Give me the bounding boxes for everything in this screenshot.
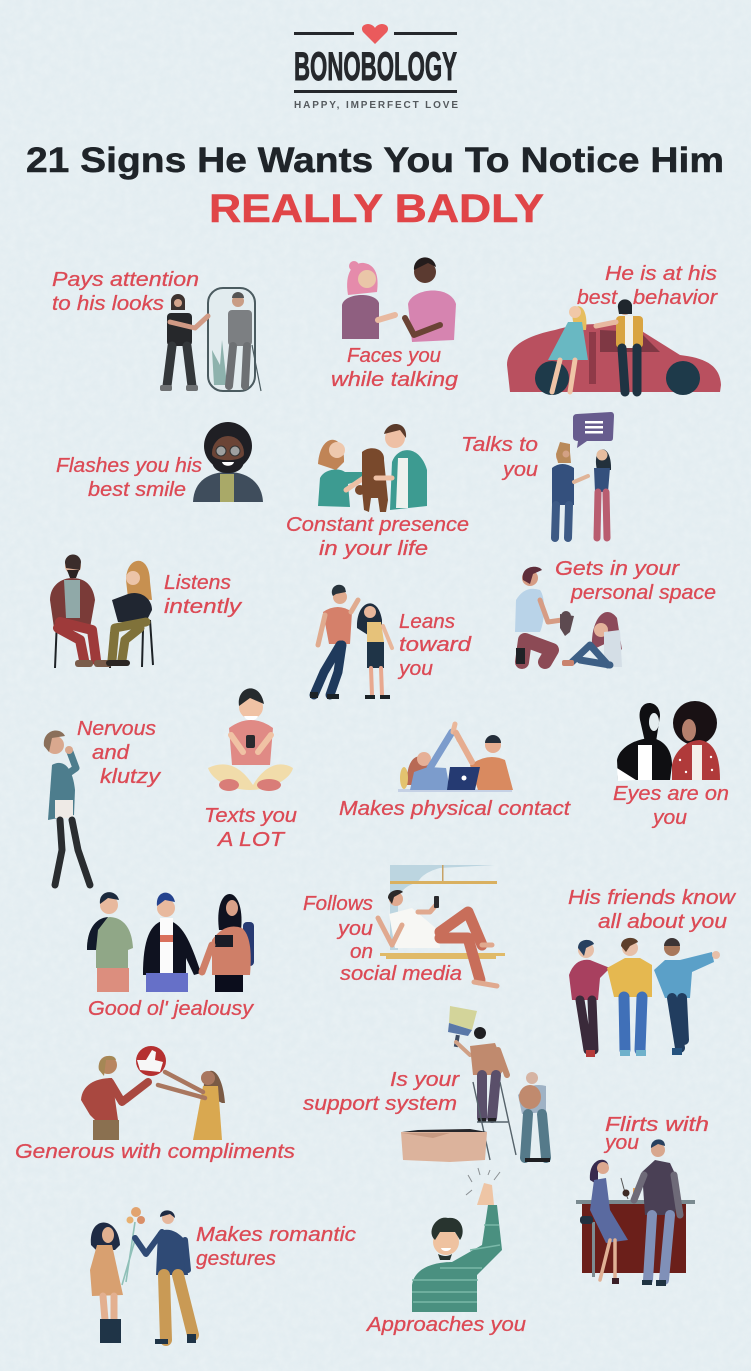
panel: faces you while talking	[331, 257, 459, 391]
panel: makes romantic gestures	[90, 1207, 357, 1344]
panel: his friends know all about you	[568, 886, 736, 1057]
label: Makes romantic	[196, 1223, 357, 1246]
illustration: two people talking	[342, 257, 456, 342]
label: A LOT	[216, 828, 286, 851]
title: 21 Signs He Wants You To Notice Him	[26, 141, 724, 180]
subtitle: REALLY BADLY	[209, 187, 544, 231]
label	[577, 262, 718, 309]
illustration: two people seated	[50, 554, 153, 668]
illustration: smiling man with afro	[193, 422, 263, 502]
label: you	[651, 806, 687, 829]
label: He is at his	[605, 262, 717, 285]
label: all about you	[598, 910, 727, 933]
illustration: man texting, sitting cross-legged	[208, 688, 293, 791]
label	[196, 1223, 357, 1270]
panel: constant presence in your life	[286, 424, 469, 560]
label	[77, 717, 162, 788]
panel: texts you a lot	[204, 688, 297, 851]
label: Flirts with	[605, 1113, 709, 1136]
label: Gets in your	[555, 557, 680, 580]
label	[461, 433, 538, 481]
label	[204, 804, 297, 851]
illustration: couple by red car	[507, 299, 721, 395]
illustration: leaning couple	[310, 585, 392, 699]
label: Constant presence	[286, 513, 469, 536]
panel: pays attention to his looks	[52, 268, 261, 391]
label: support system	[303, 1092, 457, 1115]
illustration: man at mirror	[160, 288, 261, 391]
label	[164, 571, 243, 618]
label: best smile	[88, 478, 186, 501]
label: gestures	[196, 1247, 276, 1270]
label	[303, 1068, 460, 1115]
panel: eyes are on you	[613, 701, 729, 829]
label: Is your	[390, 1068, 460, 1091]
label: personal space	[570, 581, 716, 604]
label: Talks to	[461, 433, 538, 456]
label: klutzy	[100, 765, 162, 788]
label: you	[501, 458, 538, 481]
label: Pays attention	[52, 268, 199, 291]
panel: listens intently	[50, 554, 243, 668]
panel: leans toward you	[310, 585, 472, 699]
illustration: couple looking at each other	[617, 701, 720, 781]
label: Listens	[164, 571, 231, 594]
label: you	[336, 917, 373, 940]
label: you	[397, 657, 433, 680]
label: Approaches you	[365, 1313, 526, 1336]
label: social media	[340, 962, 462, 985]
label: behavior	[633, 286, 718, 309]
label: to his looks	[52, 292, 164, 315]
panel: generous with compliments	[15, 1046, 295, 1163]
label	[613, 782, 729, 829]
label: Faces you	[347, 344, 441, 367]
label: Flashes you his	[56, 454, 202, 477]
panel: follows you on social media	[303, 865, 505, 986]
icon: speech bubble	[573, 412, 614, 448]
panel: is your support system	[303, 1006, 550, 1162]
label: Makes physical contact	[339, 797, 571, 820]
illustration: three people, holding hands	[87, 892, 254, 992]
panel: gets in your personal space	[515, 557, 716, 667]
panel: nervous and klutzy	[44, 717, 162, 885]
logo tagline: HAPPY, IMPERFECT LOVE	[294, 100, 458, 111]
illustration: man waving	[412, 1168, 502, 1312]
panel: good ol' jealousy	[87, 892, 255, 1020]
label: intently	[164, 595, 243, 618]
panel: approaches you	[365, 1168, 526, 1336]
illustration: man and woman talking	[552, 442, 611, 538]
label	[397, 610, 472, 680]
label: Follows	[303, 892, 373, 915]
label	[286, 513, 469, 560]
label: Leans	[399, 610, 455, 633]
label: and	[92, 741, 130, 764]
label: in your life	[319, 537, 428, 560]
panel: talks to you	[461, 412, 614, 538]
label: while talking	[331, 368, 459, 391]
label	[331, 344, 459, 391]
label	[56, 454, 202, 501]
label: Generous with compliments	[15, 1140, 295, 1163]
illustration: painter on ladder with helper and box	[401, 1006, 550, 1162]
label: you	[603, 1131, 639, 1154]
illustration: nervous man	[44, 731, 90, 885]
illustration: couple with dog	[318, 424, 427, 512]
label: Eyes are on	[613, 782, 729, 805]
illustration: man with teddy and seated woman	[515, 567, 622, 667]
label	[555, 557, 716, 604]
illustration: couple with thumbs-up badge	[81, 1046, 225, 1140]
label: toward	[399, 633, 472, 656]
panel: makes physical contact	[339, 724, 571, 820]
label	[568, 886, 736, 933]
logo: Bonobology	[294, 24, 458, 111]
label	[52, 268, 199, 315]
illustration: three friends	[569, 938, 720, 1057]
icon: heart	[362, 24, 388, 44]
label	[603, 1113, 709, 1154]
panel: he is at his best behavior	[507, 262, 721, 395]
label: Good ol' jealousy	[88, 997, 255, 1020]
illustration: high five over laptop	[398, 724, 513, 792]
logo wordmark: BONOBOLOGY	[294, 45, 457, 89]
label: His friends know	[568, 886, 736, 909]
panel: flirts with you	[576, 1113, 709, 1286]
label: Nervous	[77, 717, 156, 740]
panel: flashes you his best smile	[56, 422, 263, 502]
label	[303, 892, 462, 985]
illustration: couple at a bar	[576, 1139, 695, 1286]
label: on	[350, 940, 373, 963]
label: best	[577, 286, 618, 309]
illustration: man reclining on window sill with phone	[378, 865, 505, 986]
label: Texts you	[204, 804, 297, 827]
illustration: man giving flowers	[90, 1207, 196, 1344]
